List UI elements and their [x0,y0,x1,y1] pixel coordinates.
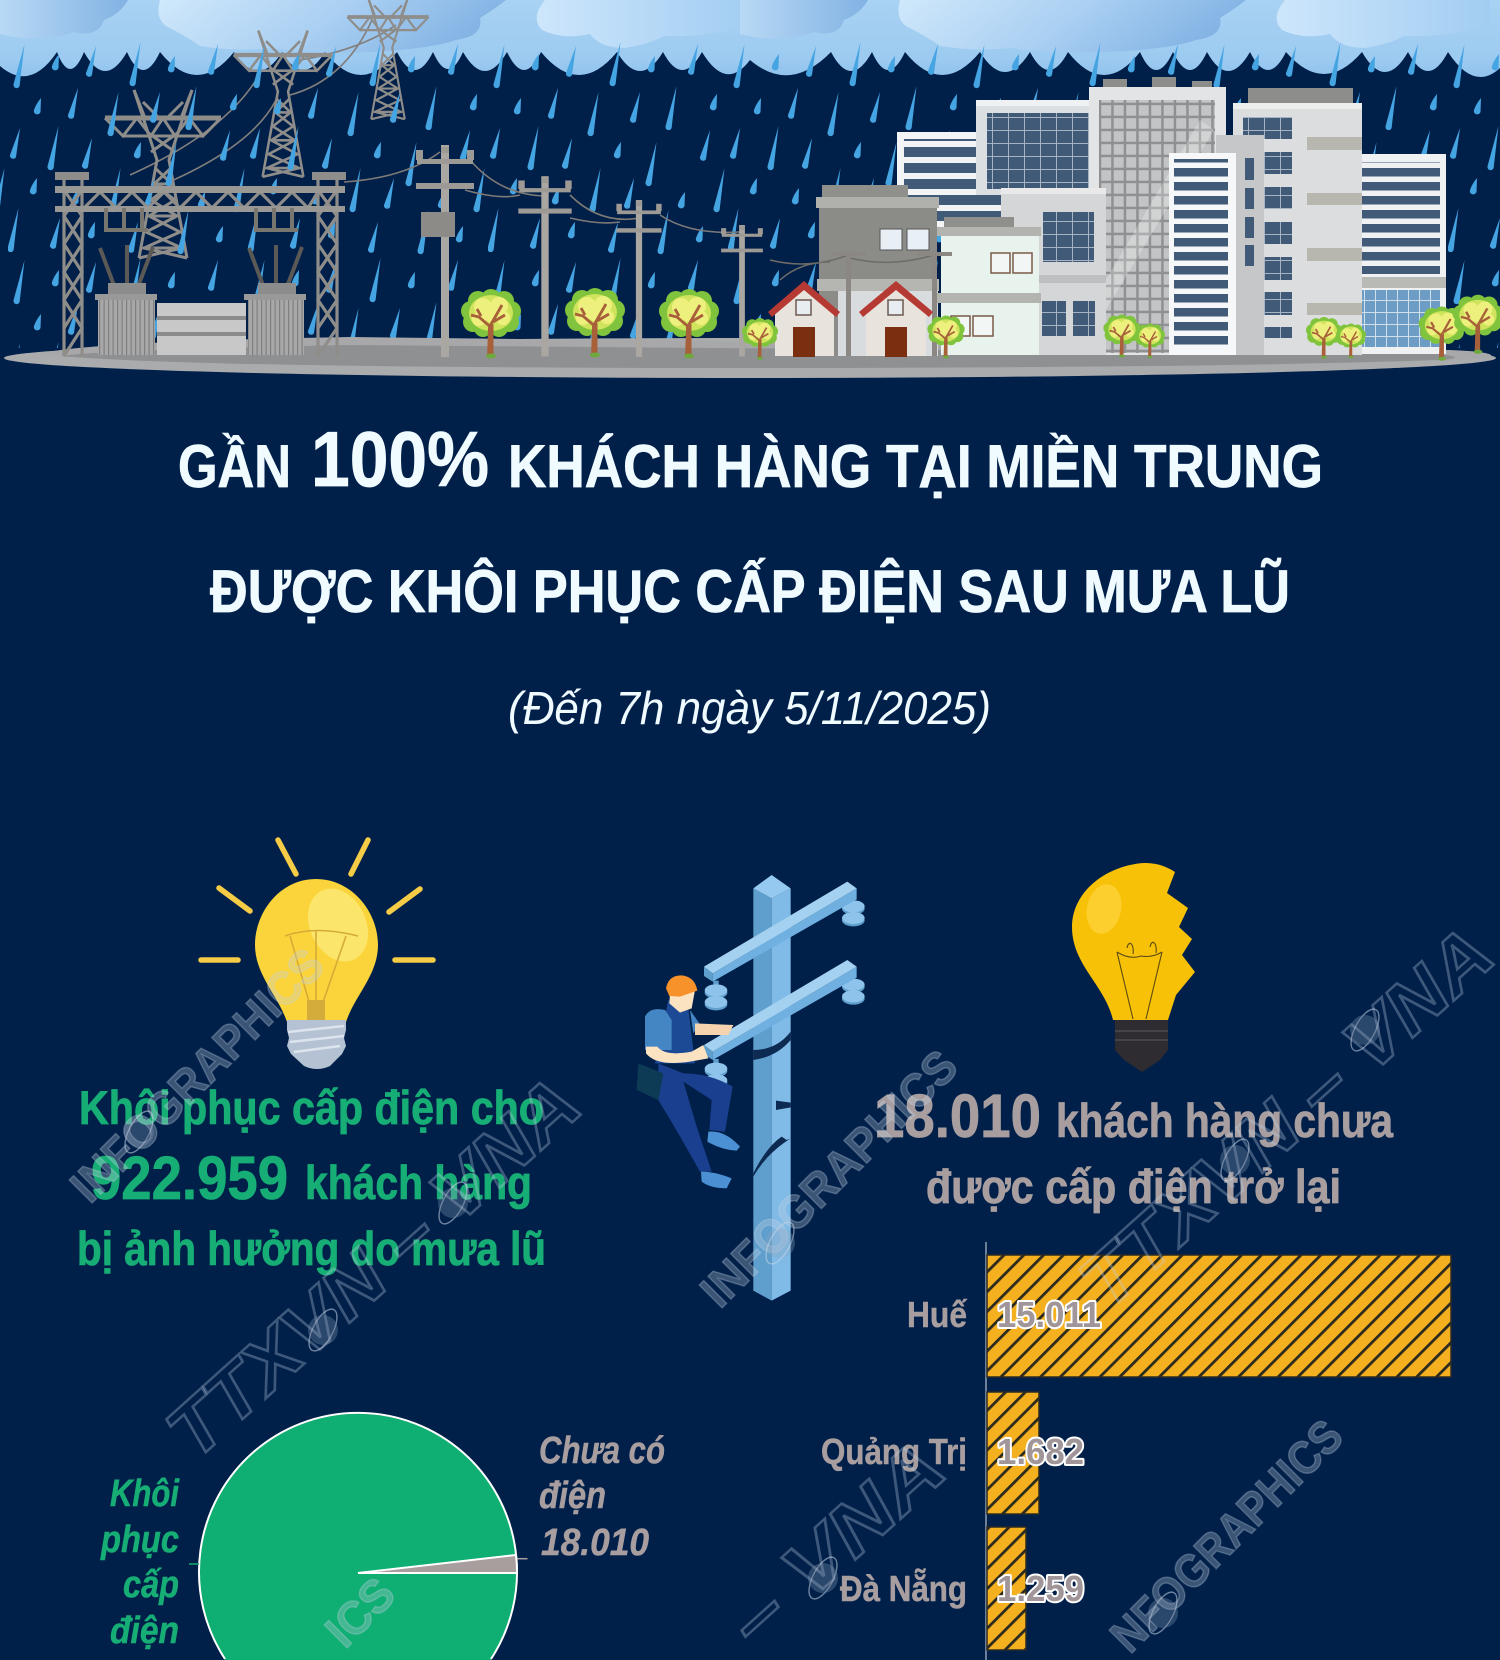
bar: Huế: 15.011 [997,1294,1101,1335]
trees [461,288,1500,361]
watermarks [60,911,1500,1660]
pie label: restored [100,1473,180,1652]
pie label: without power: 18.010 [541,1522,649,1564]
pie label: restored: phục [100,1519,179,1561]
white striped tower [1169,153,1236,355]
pole [753,875,791,1301]
pie label: restored: Khôi [110,1473,180,1515]
title: ĐƯỢC KHÔI PHỤC CẤP ĐIỆN SAU MƯA LŨ [210,558,1290,625]
glass block [976,100,1091,195]
light grey right block [1233,88,1362,355]
watermarks: TTXVN – VNA [150,1061,596,1474]
grey stat text [874,1082,1394,1213]
back left striped block [897,132,1012,232]
pie label: restored: cấp [123,1564,179,1606]
city buildings [768,77,1446,357]
right striped block with glass lobby [1362,154,1446,354]
bar: Quảng Trị [821,1392,1084,1514]
grey stat text: được cấp điện trở lại [926,1160,1341,1213]
title: KHÁCH HÀNG TẠI MIỀN TRUNG [508,433,1323,500]
subtitle date: (Đến 7h ngày 5/11/2025) [508,682,991,734]
grey stat text: khách hàng chưa [1056,1094,1394,1147]
green stat text [77,1081,546,1275]
worker [637,975,740,1188]
crossarms and insulators [704,882,865,1089]
bar: Đà Nẵng [840,1527,1084,1650]
icon: broken light bulb [1072,863,1195,1072]
rain [0,42,1500,348]
watermarks: INFOGRAPHICS [690,1039,967,1317]
watermarks: – VNA [710,1425,960,1660]
mid-rise block [1001,188,1106,355]
pie label: without power: Chưa có [539,1430,665,1472]
bar: Huế [907,1255,1451,1377]
bar: Đà Nẵng: Đà Nẵng [840,1567,967,1609]
hero illustration: storm over power grid and city [0,0,1500,378]
bar: Quảng Trị: Quảng Trị [821,1431,967,1472]
green stat text: Khôi phục cấp điện cho [79,1081,544,1134]
green stat text: khách hàng [305,1156,532,1209]
pie label: without power: điện [539,1475,606,1517]
icon: lineman climbing electric pole [637,875,865,1301]
bar: Quảng Trị: 1.682 [997,1431,1084,1472]
grey stat text: 18.010 [874,1082,1041,1150]
power substation [55,172,346,356]
mint house [937,217,1041,355]
storm clouds [0,0,1500,77]
title: GẦN [178,433,291,500]
watermarks: NFOGRAPHICS [1100,1409,1353,1660]
transmission pylons [105,0,429,258]
bar: Đà Nẵng: 1.259 [997,1568,1084,1609]
small street poles [770,250,952,356]
pie chart [189,1413,528,1660]
bar chart [821,1242,1451,1660]
title: 100% [311,415,489,503]
pie label: without power [539,1430,665,1564]
pie slice: no power [358,1555,517,1573]
ground road [4,337,1496,378]
watermarks: ICS [315,1567,405,1657]
houses [768,281,933,357]
mid grey slab [1216,135,1264,355]
watermarks: TTXVN – VNA [1063,911,1500,1324]
pie label: restored: điện [110,1610,179,1652]
distribution poles and wires [344,145,763,357]
green stat text: 922.959 [91,1144,288,1212]
bar: Huế: Huế [907,1294,968,1335]
icon: glowing light bulb [201,840,433,1069]
title [178,415,1323,625]
transformers [95,208,306,355]
tall grey grid tower [1089,77,1226,355]
watermarks: INFOGRAPHICS [60,938,334,1212]
green stat text: bị ảnh hưởng do mưa lũ [77,1222,546,1275]
dark grey old building [816,185,939,356]
